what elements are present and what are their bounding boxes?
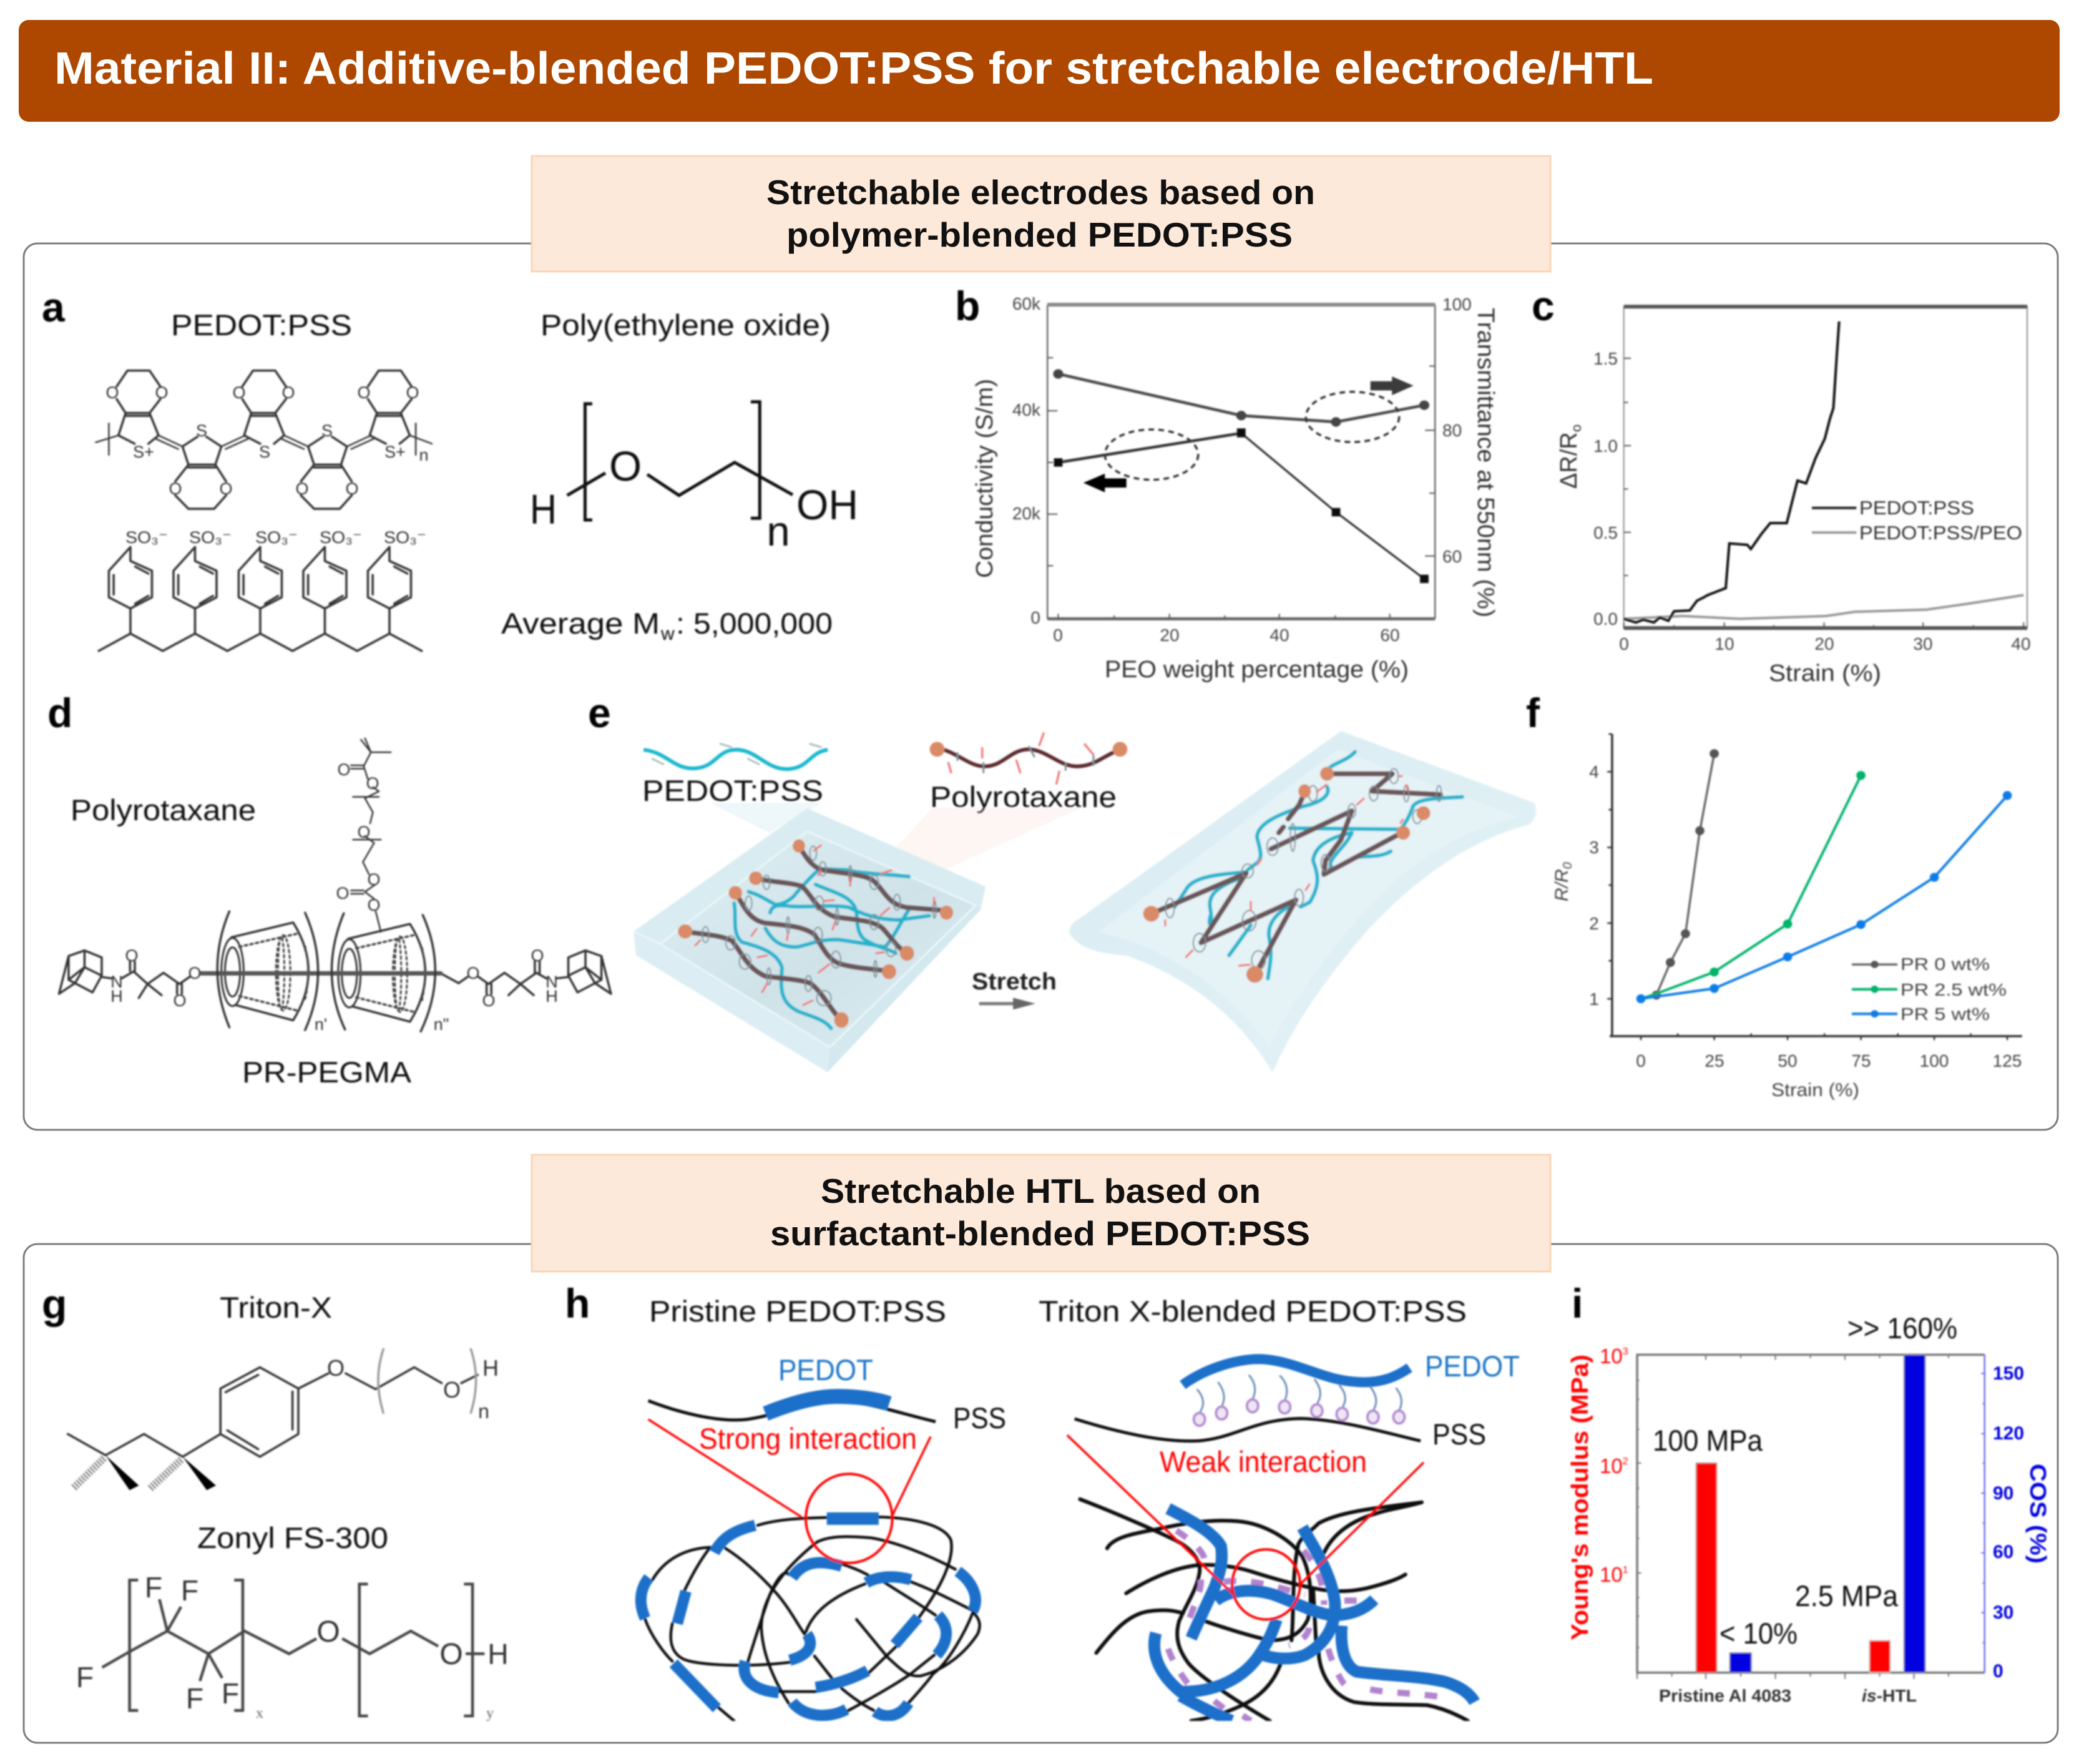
sub-panel i: modulus and COS bar chart: 120 [1993, 1423, 2024, 1444]
sub-panel b: conductivity and transmittance chart: 40 [1269, 625, 1289, 645]
sub-panel f: R/R0 vs strain chart: 100 [1920, 1051, 1949, 1071]
schematic: Triton X-blended PEDOT:PSS [1039, 1295, 1520, 1721]
chemical structure: PR-PEGMA: O [188, 964, 202, 982]
sub-panel f: R/R0 vs strain chart: Strain (%) [1771, 1080, 1859, 1100]
schematic: pristine PEDOT:PSS [641, 1295, 1006, 1721]
sub-panel i: modulus and COS bar chart: COS (%) [2025, 1464, 2051, 1564]
molecular weight label: w [660, 624, 675, 644]
sub-panel c: strain response chart: c [1532, 283, 1555, 329]
sub-panel i: modulus and COS bar chart: 0 [1993, 1661, 2003, 1682]
schematic: Triton X-blended PEDOT:PSS: Weak interaction [1160, 1445, 1367, 1478]
chemical structure: PR-PEGMA: H [545, 987, 558, 1006]
chemical structure: PR-PEGMA [59, 738, 611, 1034]
sub-panel f: R/R0 vs strain chart: 75 [1851, 1051, 1871, 1071]
chemical structure: PR-PEGMA: O [466, 964, 480, 982]
chemical structure: poly(ethylene oxide): OH [796, 482, 858, 529]
arrow: stretch: Stretch [972, 969, 1057, 995]
sub-panel f: R/R0 vs strain chart: f [1526, 690, 1540, 736]
sub-panel h: PEDOT and PSS interaction schematics: h [565, 1280, 590, 1326]
sub-panel b: conductivity and transmittance chart: 60 [1380, 625, 1400, 645]
chemical structure: Triton-X: O [443, 1377, 461, 1403]
sub-panel c: strain response chart: 10 [1715, 634, 1734, 654]
legend: PEDOT:PSS strand [642, 743, 828, 807]
sub-panel f: R/R0 vs strain chart: 50 [1778, 1051, 1798, 1071]
chemical structure: Zonyl FS-300: Zonyl FS-300 [197, 1521, 388, 1554]
sub-panel b: conductivity and transmittance chart: 20k [1012, 504, 1041, 523]
sub-panel c: strain response chart: 20 [1814, 634, 1834, 654]
sub-panel i: modulus and COS bar chart: is-HTL [1862, 1686, 1917, 1705]
sub-panel b: conductivity and transmittance chart: 0 [1053, 625, 1063, 645]
sub-panel e: stretch schematic: e [588, 690, 611, 736]
chemical structure: Zonyl FS-300 [76, 1521, 509, 1722]
slab after stretching [1069, 731, 1536, 1072]
chemical structure: PR-PEGMA: H [110, 987, 123, 1006]
sub-panel f: R/R0 vs strain chart: 25 [1705, 1051, 1724, 1071]
sub-panel f: R/R0 vs strain chart: 3 [1589, 838, 1599, 857]
chemical structure: Zonyl FS-300: O [439, 1638, 463, 1671]
molecular weight label: Average M [501, 607, 660, 640]
chemical structure: Triton-X: Triton-X [220, 1291, 332, 1324]
sub-panel f: R/R0 vs strain chart: 0 [1561, 862, 1575, 869]
sub-panel b: conductivity and transmittance chart [955, 283, 1499, 683]
bar: modulus is-HTL [1869, 1640, 1891, 1673]
chemical structure: Zonyl FS-300: H [487, 1638, 509, 1670]
sub-panel f: R/R0 vs strain chart: PR 0 wt% [1900, 954, 1990, 974]
schematic: Triton X-blended PEDOT:PSS: PEDOT [1425, 1350, 1520, 1383]
molecular weight label [501, 607, 833, 644]
section heading: surfactant-blended [532, 1155, 1550, 1272]
sub-panel i: modulus and COS bar chart: 10 [1600, 1454, 1623, 1477]
section heading: polymer-blended [532, 156, 1550, 272]
sub-panel i: modulus and COS bar chart: Young's modulus (MPa) [1567, 1355, 1593, 1640]
schematic: pristine PEDOT:PSS: PSS [953, 1401, 1006, 1434]
chemical structure: PEDOT: O [357, 383, 371, 402]
chemical structure: Triton-X: O [327, 1355, 345, 1381]
sub-panel i: modulus and COS bar chart [1567, 1280, 2051, 1705]
sub-panel b: conductivity and transmittance chart: 0 [1030, 608, 1040, 627]
sub-panel f: R/R0 vs strain chart [1526, 690, 2022, 1100]
series: PR 5 wt% [1636, 791, 2012, 1003]
chemical structure: PEDOT: S [259, 443, 270, 461]
sub-panel a: PEDOT:PSS and PEO structures: PEDOT:PSS [171, 308, 352, 341]
panel: stretchable HTL [24, 1155, 2058, 1743]
sub-panel i: modulus and COS bar chart: 10 [1600, 1345, 1623, 1368]
chemical structure: Zonyl FS-300: F [181, 1574, 198, 1607]
schematic: pristine PEDOT:PSS: PEDOT [778, 1353, 873, 1386]
series: PR 0 wt% [1641, 749, 1719, 999]
chemical structure: PR-PEGMA: O [531, 946, 544, 965]
section heading: surfactant-blended: surfactant-blended PEDOT:PSS [770, 1214, 1310, 1253]
schematic: Triton X-blended PEDOT:PSS: Triton X-blended PEDOT:PSS [1039, 1295, 1467, 1328]
sub-panel i: modulus and COS bar chart: 2.5 MPa [1795, 1579, 1899, 1612]
chemical structure: PEDOT: O [345, 479, 359, 498]
chemical structure: PR-PEGMA: O [367, 896, 381, 914]
chemical structure: PSS: SO₃⁻ [255, 528, 298, 547]
chemical structure: PR-PEGMA: O [367, 870, 381, 889]
sub-panel g: surfactant structures: g [42, 1281, 67, 1327]
sub-panel i: modulus and COS bar chart: 2 [1623, 1456, 1628, 1467]
chemical structure: PEDOT: S+ [133, 443, 154, 461]
sub-panel b: conductivity and transmittance chart: 20 [1160, 625, 1180, 645]
sub-panel b: conductivity and transmittance chart: 60 [1442, 547, 1462, 566]
sub-panel e: stretch schematic [588, 690, 1536, 1072]
sub-panel c: strain response chart: Strain (%) [1769, 660, 1881, 687]
chemical structure: PEDOT: O [281, 383, 295, 402]
chemical structure: PEDOT: O [105, 383, 119, 402]
chemical structure: PEDOT: O [295, 479, 309, 498]
sub-panel c: strain response chart: 0.5 [1593, 523, 1618, 542]
sub-panel d: polyrotaxane structure: PR-PEGMA [242, 1056, 412, 1089]
section heading: polymer-blended: polymer-blended PEDOT:PSS [786, 215, 1293, 254]
sub-panel i: modulus and COS bar chart: 90 [1993, 1483, 2013, 1504]
sub-panel b: conductivity and transmittance chart: 60k [1012, 294, 1041, 313]
title banner [19, 20, 2060, 122]
schematic: pristine PEDOT:PSS: Pristine PEDOT:PSS [649, 1295, 946, 1328]
faint funnels linking legend to slab [710, 803, 1081, 870]
sub-panel c: strain response chart: 0.0 [1593, 609, 1618, 629]
sub-panel h: PEDOT and PSS interaction schematics [565, 1280, 1520, 1721]
sub-panel c: strain response chart: 1.5 [1593, 349, 1618, 368]
chemical structure: PSS: SO₃⁻ [384, 528, 426, 547]
sub-panel f: R/R0 vs strain chart: 0 [1636, 1051, 1646, 1071]
sub-panel f: R/R0 vs strain chart: PR 5 wt% [1900, 1004, 1990, 1024]
chemical structure: PSS [99, 528, 426, 651]
sub-panel i: modulus and COS bar chart: 150 [1993, 1363, 2024, 1384]
sub-panel i: modulus and COS bar chart: >> 160% [1847, 1311, 1957, 1345]
chemical structure: PEDOT: O [219, 479, 233, 498]
chemical structure: PR-PEGMA: O [366, 774, 379, 793]
chemical structure: Triton-X: H [482, 1355, 499, 1381]
chemical structure: PSS: SO₃⁻ [189, 528, 232, 547]
sub-panel b: conductivity and transmittance chart: 100 [1442, 295, 1472, 314]
chemical structure: PR-PEGMA: O [357, 823, 371, 841]
chemical structure: PEDOT: S [196, 421, 207, 440]
sub-panel i: modulus and COS bar chart: 3 [1623, 1346, 1628, 1357]
sub-panel b: conductivity and transmittance chart: 40k [1012, 400, 1041, 419]
chemical structure: PEDOT: n [419, 446, 429, 464]
sub-panel f: R/R0 vs strain chart: PR 2.5 wt% [1900, 980, 2007, 999]
legend: polyrotaxane strand: Polyrotaxane [930, 780, 1117, 813]
chemical structure: Zonyl FS-300: F [186, 1682, 203, 1715]
sub-panel f: R/R0 vs strain chart: R/R [1552, 869, 1572, 901]
sub-panel i: modulus and COS bar chart: 100 MPa [1653, 1424, 1763, 1457]
title: Material II: Additive-blended PEDOT:PSS for stretchable electrode/HTL [54, 44, 1653, 94]
sub-panel a: PEDOT:PSS and PEO structures: Poly(ethylene oxide) [541, 308, 831, 341]
sub-panel d: polyrotaxane structure [47, 690, 611, 1089]
bar: modulus pristine [1696, 1463, 1717, 1673]
sub-panel f: R/R0 vs strain chart: 4 [1589, 762, 1599, 782]
sub-panel f: R/R0 vs strain chart: 2 [1589, 914, 1599, 933]
sub-panel c: strain response chart: ΔR/R [1556, 432, 1582, 489]
chemical structure: Zonyl FS-300: y [486, 1705, 494, 1722]
molecular weight label: : 5,000,000 [676, 607, 833, 640]
schematic: Triton X-blended PEDOT:PSS: PSS [1432, 1418, 1486, 1451]
sub-panel a: PEDOT:PSS and PEO structures: a [42, 284, 66, 330]
sub-panel i: modulus and COS bar chart: < 10% [1719, 1617, 1798, 1650]
series: PR 2.5 wt% [1641, 771, 1866, 999]
schematic: pristine PEDOT:PSS: Strong interaction [699, 1422, 917, 1455]
chemical structure: PR-PEGMA: N [545, 973, 558, 991]
sub-panel d: polyrotaxane structure: d [47, 690, 72, 736]
chemical structure: poly(ethylene oxide): H [530, 486, 557, 533]
chemical structure: PEDOT: S+ [384, 443, 406, 461]
chemical structure: PSS: SO₃⁻ [125, 528, 168, 547]
chemical structure: PR-PEGMA: O [336, 884, 350, 903]
chemical structure: PEDOT: S [321, 421, 333, 440]
sub-panel c: strain response chart: 1.0 [1593, 436, 1618, 456]
sub-panel g: surfactant structures [42, 1281, 509, 1722]
chemical structure: PEDOT: O [155, 383, 169, 402]
sub-panel b: conductivity and transmittance chart: Transmittance at 550nm (%) [1472, 308, 1499, 617]
section heading: polymer-blended: Stretchable electrodes based on [766, 173, 1315, 212]
sub-panel d: polyrotaxane structure: Polyrotaxane [71, 793, 256, 826]
sub-panel b: conductivity and transmittance chart: b [955, 283, 980, 329]
sub-panel i: modulus and COS bar chart: 60 [1993, 1542, 2013, 1562]
sub-panel i: modulus and COS bar chart: 1 [1623, 1565, 1628, 1575]
panel: stretchable electrodes [24, 156, 2058, 1130]
sub-panel a: PEDOT:PSS and PEO structures [42, 284, 858, 651]
bar: COS pristine [1729, 1653, 1751, 1673]
chemical structure: PR-PEGMA: n" [434, 1015, 449, 1034]
sub-panel i: modulus and COS bar chart: i [1572, 1280, 1583, 1326]
sub-panel c: strain response chart: PEDOT:PSS/PEO [1859, 522, 2022, 544]
sub-panel i: modulus and COS bar chart: 10 [1600, 1563, 1623, 1586]
chemical structure: PR-PEGMA: N [110, 973, 123, 991]
section heading: surfactant-blended: Stretchable HTL based on [821, 1172, 1261, 1210]
chemical structure: PR-PEGMA: O [173, 991, 187, 1010]
sub-panel c: strain response chart: PEDOT:PSS [1859, 497, 1974, 519]
sub-panel i: modulus and COS bar chart: Pristine Al 4083 [1659, 1686, 1791, 1705]
chemical structure: poly(ethylene oxide) [530, 402, 858, 555]
chemical structure: poly(ethylene oxide): n [766, 508, 790, 555]
sub-panel c: strain response chart [1532, 283, 2031, 687]
sub-panel b: conductivity and transmittance chart: PEO weight percentage (%) [1105, 657, 1409, 683]
arrow: stretch [972, 969, 1057, 1009]
bar: COS is-HTL [1904, 1355, 1925, 1673]
sub-panel c: strain response chart: 0 [1619, 634, 1629, 654]
chemical structure: Zonyl FS-300: F [145, 1571, 162, 1604]
chemical structure: PEDOT: O [406, 383, 419, 402]
legend: polyrotaxane strand [930, 732, 1127, 813]
chemical structure: PEDOT: O [232, 383, 246, 402]
sub-panel b: conductivity and transmittance chart: Conductivity (S/m) [972, 379, 998, 578]
chemical structure: PSS: SO₃⁻ [320, 528, 362, 547]
chemical structure: PR-PEGMA: O [125, 946, 139, 965]
slab before stretching [633, 808, 986, 1072]
chemical structure: Zonyl FS-300: F [222, 1677, 239, 1710]
sub-panel f: R/R0 vs strain chart: 1 [1589, 989, 1599, 1009]
sub-panel i: modulus and COS bar chart: 30 [1993, 1602, 2013, 1623]
chemical structure: poly(ethylene oxide): O [609, 443, 642, 490]
chemical structure: PR-PEGMA: O [482, 991, 496, 1010]
sub-panel c: strain response chart: 30 [1913, 634, 1933, 654]
chemical structure: Triton-X: n [478, 1400, 489, 1423]
sub-panel f: R/R0 vs strain chart: 125 [1993, 1051, 2022, 1071]
sub-panel c: strain response chart: o [1568, 424, 1584, 432]
chemical structure: Zonyl FS-300: F [76, 1661, 94, 1693]
chemical structure: PEDOT [95, 371, 432, 509]
chemical structure: Triton-X [68, 1291, 499, 1490]
sub-panel b: conductivity and transmittance chart: 80 [1442, 421, 1462, 440]
chemical structure: Zonyl FS-300: O [316, 1615, 340, 1649]
sub-panel c: strain response chart: 40 [2011, 634, 2031, 654]
chemical structure: PR-PEGMA: O [337, 760, 351, 779]
chemical structure: PEDOT: O [169, 479, 182, 498]
chemical structure: PR-PEGMA: n' [315, 1015, 327, 1034]
chemical structure: Zonyl FS-300: x [256, 1705, 263, 1722]
legend: PEDOT:PSS strand: PEDOT:PSS [642, 774, 823, 807]
